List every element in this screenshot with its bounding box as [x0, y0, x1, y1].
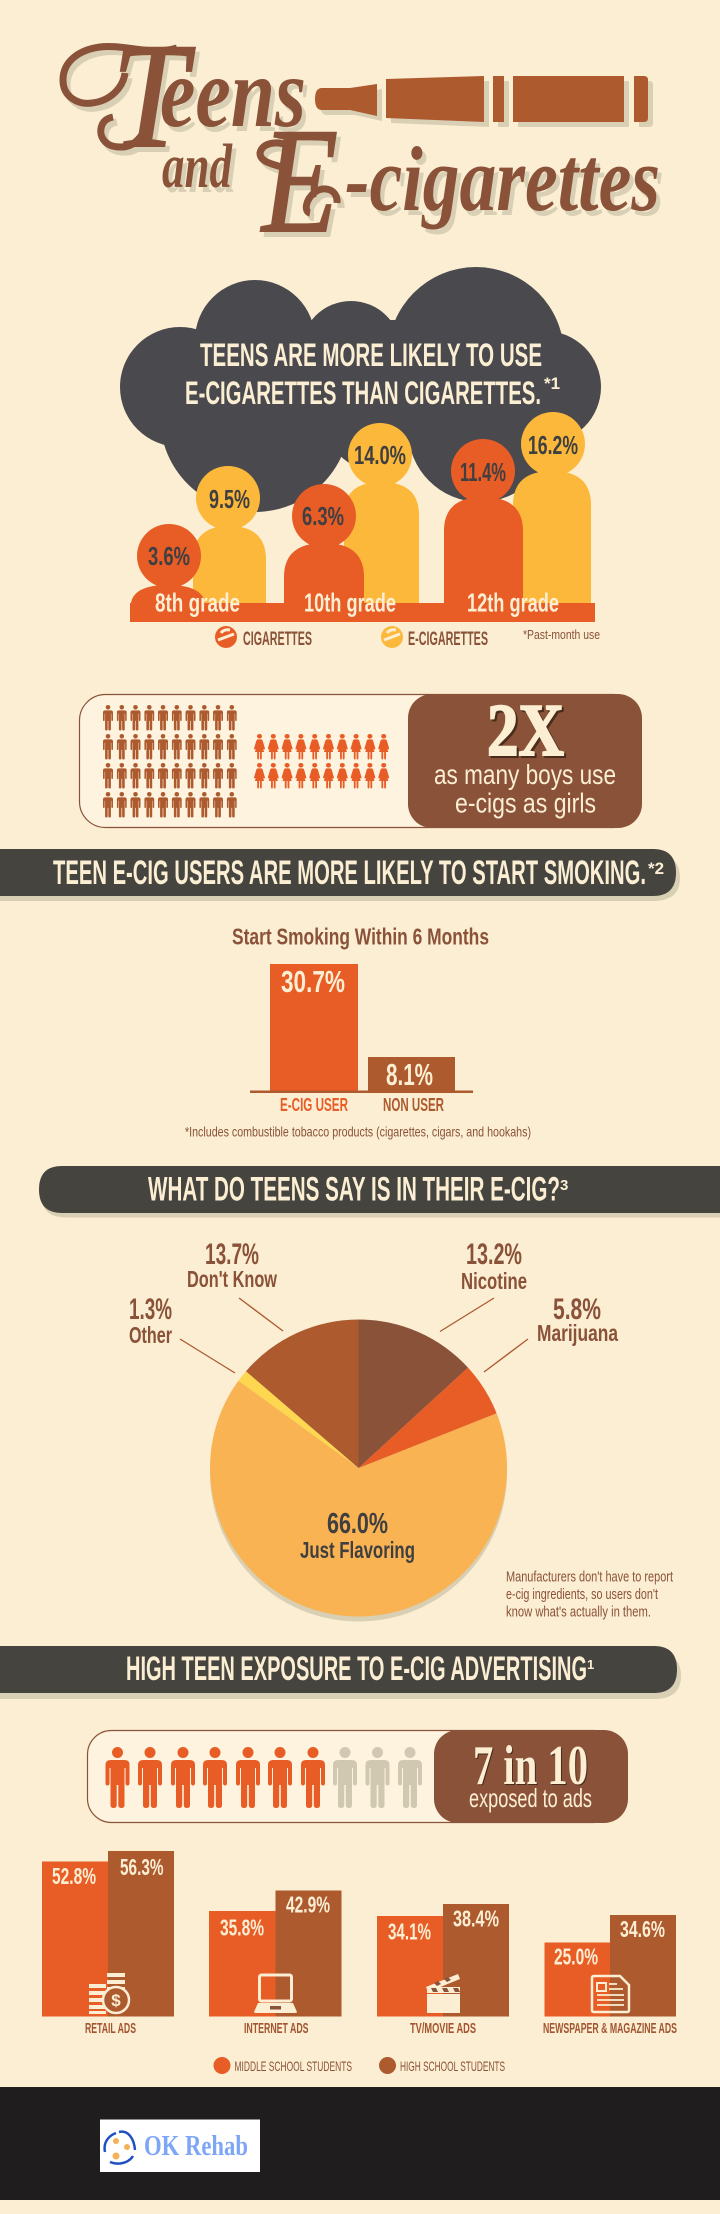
callout: 2X: e-cigs as girls — [455, 788, 596, 818]
exposed people pictogram — [106, 1747, 325, 1808]
footnote: *Includes combustible tobacco products (cigarettes, cigars, and hookahs) — [185, 1124, 531, 1140]
callout: 2X — [408, 690, 642, 828]
slice: marijuana — [358, 1368, 497, 1468]
percentages — [148, 430, 578, 571]
pie shadow — [210, 1324, 507, 1622]
smoke cloud — [120, 267, 601, 512]
chart title: Start Smoking Within 6 Months — [232, 924, 489, 950]
slice: other — [238, 1371, 358, 1468]
label: other: Other — [129, 1322, 172, 1348]
cloud heading: *1 — [544, 374, 560, 393]
percentages: 3.6% — [148, 541, 190, 571]
boys pictogram — [103, 705, 237, 818]
percentages: 14.0% — [354, 440, 406, 470]
chart: grade usage figures — [130, 412, 595, 622]
e-cigarette body — [315, 76, 648, 122]
title text: eens — [160, 37, 306, 148]
girls pictogram — [254, 734, 389, 788]
heading banner: advertising: 1 — [587, 1657, 594, 1672]
logo: OK Rehab — [100, 2120, 260, 2172]
label: just flavoring: 66.0% — [327, 1508, 388, 1540]
title shadow: and — [166, 138, 237, 206]
marker: middle school — [214, 2057, 230, 2074]
icon: logo mark — [105, 2132, 135, 2164]
logo text: OK Rehab — [144, 2130, 248, 2162]
percentages: 11.4% — [460, 457, 506, 487]
footnote: *Past-month use — [523, 627, 600, 642]
title shadow — [67, 18, 664, 269]
label: nicotine: Nicotine — [461, 1268, 527, 1294]
not exposed people pictogram — [333, 1747, 422, 1808]
title text: T — [112, 13, 196, 179]
icon: clapperboard — [426, 1974, 460, 2013]
marker: high school — [379, 2057, 396, 2074]
note: manufacturers: know what's actually in them. — [506, 1604, 651, 1620]
heading banner: advertising — [0, 1646, 681, 1699]
label: RETAIL ADS — [85, 2020, 136, 2037]
label: just flavoring — [300, 1508, 415, 1563]
bar chart: newspaper and magazine ads — [543, 1915, 677, 2037]
e-cigarette figures — [193, 412, 591, 603]
cigarette figures — [131, 439, 523, 603]
callout: 7 in 10: exposed to ads — [469, 1783, 592, 1813]
label: e-cigarettes: E-CIGARETTES — [408, 629, 488, 650]
label: nicotine: 13.2% — [466, 1238, 522, 1271]
label: marijuana: 5.8% — [553, 1293, 601, 1326]
label: cigarettes: CIGARETTES — [243, 629, 312, 650]
note: manufacturers — [506, 1570, 673, 1620]
bar chart: newspaper and magazine ads: 34.6% — [620, 1916, 665, 1942]
callout: 2X: 2X — [489, 692, 566, 774]
callout: 2X: as many boys use — [434, 759, 616, 790]
note: manufacturers: e-cig ingredients, so users don't — [506, 1587, 658, 1603]
title shadow: T — [116, 18, 200, 184]
bar chart: retail ads — [42, 1851, 174, 2037]
heading banner: what is in their e-cig: 3 — [560, 1177, 568, 1194]
bar chart: internet ads — [209, 1890, 342, 2037]
bar chart: internet ads: 42.9% — [286, 1892, 330, 1918]
label: marijuana — [537, 1293, 618, 1346]
bar chart: tv/movie ads: 38.4% — [453, 1906, 499, 1932]
icon: e-cigarette — [381, 626, 403, 648]
percentages: 9.5% — [209, 484, 250, 514]
e-cigarette shadow — [320, 81, 653, 127]
label: middle school: MIDDLE SCHOOL STUDENTS — [234, 2058, 352, 2074]
grade labels — [155, 588, 559, 618]
legend: school level — [214, 2057, 505, 2074]
title — [63, 13, 664, 269]
label: INTERNET ADS — [244, 2020, 308, 2037]
icon: e-cigarette — [315, 76, 653, 127]
icon: coins: $ — [111, 1991, 121, 2010]
cloud heading: TEENS ARE MORE LIKELY TO USE — [200, 337, 542, 373]
grade labels: 10th grade — [304, 588, 396, 618]
pie chart: e-cig contents — [129, 1238, 618, 1622]
axis — [250, 1090, 473, 1093]
cloud heading — [185, 337, 560, 411]
panel: 7 in 10 exposed — [88, 1730, 628, 1823]
legend: cigarettes vs e-cigarettes — [215, 626, 600, 650]
callout: 7 in 10: 7 in 10 — [474, 1736, 589, 1798]
callout: 7 in 10 — [434, 1730, 628, 1823]
icon: coins — [89, 1973, 129, 2014]
callout: 2X: 2X — [487, 690, 564, 772]
bar: e-cig user — [270, 964, 358, 1092]
bar chart: retail ads: 52.8% — [52, 1863, 96, 1889]
label: marijuana: Marijuana — [537, 1320, 618, 1346]
label: nicotine — [461, 1238, 527, 1294]
label: e-cig user: E-CIG USER — [280, 1095, 348, 1115]
panel: boys vs girls — [80, 690, 642, 828]
bar chart: newspaper and magazine ads: 25.0% — [554, 1944, 598, 1970]
slice: just flavoring — [210, 1381, 507, 1616]
label: other: 1.3% — [129, 1293, 172, 1326]
heading banner: what is in their e-cig — [39, 1166, 720, 1218]
label: high school: HIGH SCHOOL STUDENTS — [400, 2058, 505, 2074]
grade labels: 12th grade — [467, 588, 559, 618]
label: don't know — [187, 1238, 277, 1292]
icon: cigarette — [215, 626, 237, 648]
footer — [0, 2087, 720, 2200]
bar chart: tv/movie ads — [377, 1904, 509, 2037]
icon: newspaper — [592, 1976, 629, 2012]
title text — [63, 13, 660, 264]
title shadow: eens — [164, 42, 310, 153]
title shadow: E — [264, 103, 342, 269]
bar chart: internet ads: 35.8% — [220, 1914, 264, 1940]
heading banner: start smoking: *2 — [648, 859, 664, 878]
grade labels: 8th grade — [155, 588, 240, 618]
icon: laptop — [254, 1975, 297, 2013]
base bar — [130, 603, 595, 622]
title text: E — [260, 98, 338, 264]
leader lines — [180, 1298, 528, 1373]
label: other — [129, 1293, 172, 1348]
slice: don't know — [246, 1320, 358, 1468]
percentages: 6.3% — [302, 501, 344, 531]
bar: e-cig user: 30.7% — [281, 964, 345, 999]
slice: nicotine — [358, 1320, 468, 1468]
chart: start smoking within 6 months — [185, 924, 531, 1140]
label: non user: NON USER — [383, 1095, 444, 1115]
bar: non user: 8.1% — [386, 1057, 433, 1092]
bar chart: retail ads: 56.3% — [120, 1854, 164, 1880]
heading banner: start smoking — [0, 849, 680, 901]
label: don't know: Don't Know — [187, 1266, 277, 1292]
bar chart: tv/movie ads: 34.1% — [388, 1918, 431, 1944]
label: don't know: 13.7% — [205, 1238, 259, 1271]
title text: and — [162, 133, 233, 201]
label: just flavoring: Just Flavoring — [300, 1537, 415, 1563]
percentages: 16.2% — [528, 430, 578, 460]
label: TV/MOVIE ADS — [410, 2020, 476, 2037]
callout: 7 in 10: 7 in 10 — [473, 1735, 588, 1797]
